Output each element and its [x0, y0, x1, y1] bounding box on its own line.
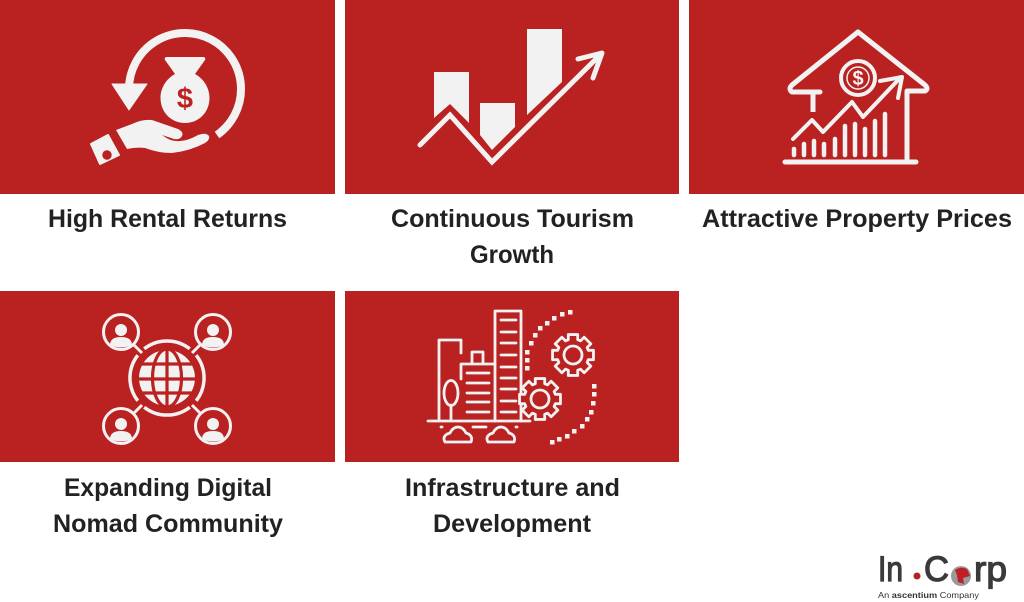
icon: city buildings with gears [428, 310, 596, 444]
icon: hand with money bag and return arrow: $ [177, 83, 193, 115]
heading: expanding digital nomad community: Expanding Digital [64, 474, 272, 502]
heading: high rental returns: High Rental Returns [48, 205, 287, 233]
heading: continuous tourism growth: Continuous Tourism [391, 205, 634, 233]
heading: expanding digital nomad community: Nomad Community [53, 510, 283, 538]
logo: InCorp: C [924, 550, 949, 589]
panel: infrastructure and development [345, 291, 679, 462]
heading: infrastructure and development [405, 474, 620, 538]
panel: attractive property prices [689, 0, 1024, 194]
panel: high rental returns [0, 0, 335, 194]
logo: InCorp: An ascentium Company [878, 590, 980, 600]
panel: expanding digital nomad community [0, 291, 335, 462]
logo: InCorp: rp [974, 550, 1007, 589]
heading: infrastructure and development: Infrastructure and [405, 474, 620, 502]
heading: expanding digital nomad community [53, 474, 283, 538]
icon: house with price chart [785, 32, 927, 162]
panel: continuous tourism growth [345, 0, 679, 194]
logo: InCorp: In [878, 550, 903, 589]
heading: infrastructure and development: Development [433, 510, 592, 538]
icon: globe connected to people [104, 314, 230, 444]
icon: bar chart with rising arrow [420, 29, 602, 162]
logo: InCorp [878, 550, 1007, 600]
heading: continuous tourism growth: Growth [470, 241, 554, 269]
heading: continuous tourism growth [391, 205, 634, 269]
heading: attractive property prices: Attractive Property Prices [702, 205, 1012, 233]
icon: house with price chart: $ [852, 68, 864, 90]
icon: hand with money bag and return arrow [91, 33, 241, 164]
